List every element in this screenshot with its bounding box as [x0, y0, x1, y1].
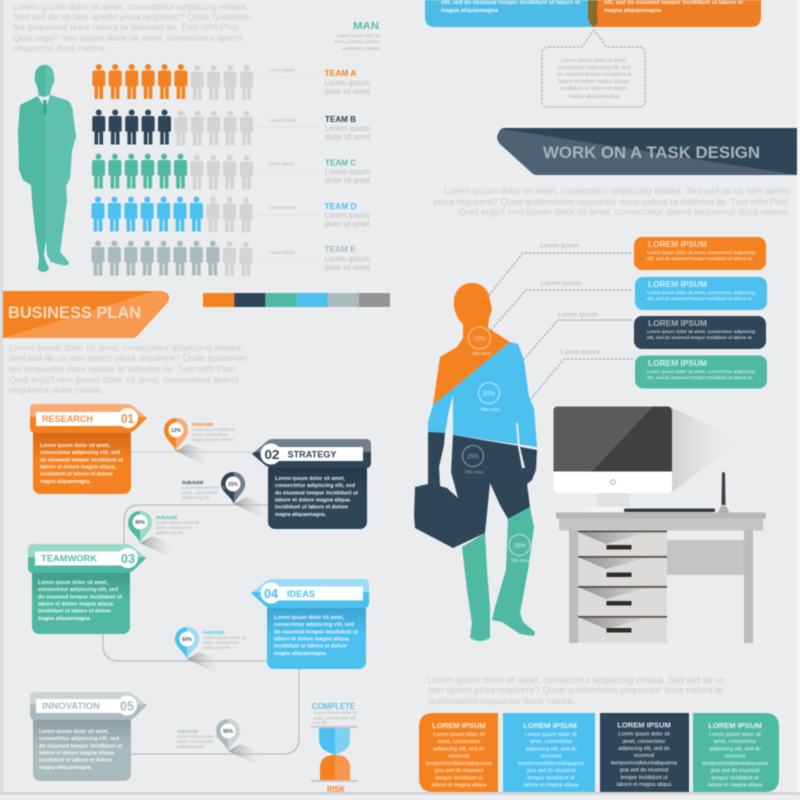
callout pill: blue: elit, sed do eiusmod tempor incididunt ut labore et. — [647, 296, 753, 301]
bottom paragraph — [428, 675, 725, 707]
card: strategy step 02: 02 — [264, 447, 280, 462]
card: innovation step 05: Lorem ipsum dolor sit amet, — [39, 729, 110, 735]
bottom card: navy: adipiscing elit, sed do — [618, 746, 670, 752]
bottom card: blue: labore et magna aliqua — [524, 782, 578, 788]
business plan paragraph — [9, 343, 248, 396]
callout pill: navy — [634, 316, 766, 349]
figure segment: orange head and shoulder — [433, 283, 510, 405]
team C label: dolor sit amet. — [325, 175, 372, 185]
figure: businessman segmented by colour — [414, 283, 537, 641]
figure value labels: 25% — [513, 544, 526, 550]
row: team A icons — [92, 64, 253, 100]
card: teamwork step 03: TEAMWORK — [41, 554, 98, 564]
card: strategy step 02: do eiusmod tempor incididunt ut — [275, 490, 358, 496]
card: innovation step 05: incididunt ut labore et dolore — [39, 758, 112, 764]
figure value labels: 20% — [483, 392, 496, 398]
work paragraph: Lorem ipsum dolor sit amet, consectetur adipiscing elitasa. Sed wid de us tam aperts — [444, 186, 790, 197]
card: strategy step 02: STRATEGY — [288, 450, 336, 460]
team E label: dolor sit amet. — [324, 262, 372, 272]
dashed callout bubble: Lorem ipsum dolor sit amet, — [561, 58, 627, 64]
team A label: dolor sit amet. — [324, 86, 372, 96]
bottom card: orange: Lorem ipsum dolor sit — [433, 732, 485, 738]
card: teamwork step 03: consectetur adipiscing elit, sed — [38, 587, 118, 593]
row: team C icons — [92, 154, 253, 190]
dashed callout bubble: do eiusmod tempor incididunt ut — [556, 72, 632, 78]
team A label: TEAM A — [324, 68, 356, 78]
team B label: Lorem ipsum — [270, 118, 296, 122]
bottom card: teal: eiusmod — [725, 754, 745, 760]
business plan paragraph: Sed wid de us tam aperts plura requirere? Quae quidemie- — [9, 353, 248, 364]
bottom card: blue: tempor incididunt ut — [527, 776, 575, 782]
bottom card: teal: temporincididuntaliquama — [702, 761, 768, 767]
hourglass: complete to risk: Lorem ipsum dolor sit — [314, 710, 358, 715]
pin: 60 percent: adipiscing elit — [203, 645, 231, 650]
bottom card: teal: LOREM IPSUM — [708, 721, 762, 730]
heading banner: business plan: BUSINESS PLAN — [8, 304, 141, 322]
hourglass: complete to risk — [311, 701, 358, 794]
bottom card: navy: LOREM IPSUM — [617, 720, 671, 730]
bottom card: orange — [419, 713, 498, 792]
team C label — [256, 158, 372, 185]
pin: 95 percent: 95% — [223, 729, 234, 735]
pin: 40 percent: SUBJUDE — [156, 515, 178, 520]
team E label: TEAM E — [324, 244, 356, 254]
pin: 25 percent: SUBJUDE — [182, 480, 204, 485]
row: team B icons — [92, 110, 253, 146]
card: strategy step 02: Lorem ipsum dolor sit amet, — [275, 476, 346, 482]
business plan paragraph: tes sequuntur duce natura ta videntes ile. Tum mihi Piso. — [9, 364, 237, 375]
pin: 12 percent: adipiscing elit sed do — [192, 437, 234, 442]
callout pill: navy: elit, sed do eiusmod tempor incididunt ut labore et. — [647, 335, 753, 340]
team D label: Lorem ipsum — [324, 210, 370, 220]
intro paragraph: man section: Lorem ipsum dolor sit amet, consectetur adipiscing elitasa. — [13, 2, 248, 13]
pin: 25 percent: Lorem ipsum dolor sit — [182, 485, 226, 490]
heading banner: business plan — [3, 291, 169, 338]
card: research step 01: Lorem ipsum dolor sit amet, — [40, 443, 111, 449]
card: teamwork step 03: 03 — [121, 551, 135, 566]
card: ideas step 04: incididunt ut labore et dolore — [274, 644, 347, 650]
card: innovation step 05: labore et dolore magna aliqua. — [39, 750, 116, 756]
pin: 95 percent: amet, consectetur — [177, 739, 213, 744]
dashed leader lines with labels: Lorem ipsum — [540, 244, 579, 250]
bottom card: blue: eiusmod — [541, 754, 561, 760]
pin: 12 percent: SUBJUDE — [192, 422, 214, 427]
intro paragraph: man section: sequuntur duce natura. — [13, 43, 107, 54]
bottom card: navy: Lorem ipsum dolor sit — [618, 732, 670, 738]
pin: 25 percent: amet, consectetur — [182, 490, 218, 495]
dashed callout bubble — [542, 30, 645, 107]
bottom card: teal: labore et magna aliqua — [708, 782, 762, 788]
bottom card: navy: amet, consectetur — [623, 739, 666, 745]
card: teamwork step 03: labore et dolore magna aliqua. — [38, 602, 115, 608]
bottom card: blue: LOREM IPSUM — [523, 721, 577, 730]
team D label — [256, 201, 372, 228]
callout pill: orange: LOREM IPSUM — [648, 239, 707, 249]
team A label — [256, 68, 372, 96]
card: research step 01: labore et dolore magna aliqua. — [40, 464, 117, 470]
bottom card: navy: temporincididuntaliquama — [611, 760, 677, 766]
card: research step 01: RESEARCH — [42, 414, 93, 424]
icon: man in suit silhouette — [18, 65, 76, 272]
pin: 25 percent: adipiscing elit — [182, 495, 210, 500]
work paragraph: plura requirere? Quae quidemietes sequuntur duce natura ta videntes ile. Tum mihi Piso. — [434, 197, 790, 208]
figure value labels — [464, 336, 530, 563]
team C label: TEAM C — [325, 158, 356, 168]
figure value labels: 25% — [467, 454, 480, 460]
card: ideas step 04: do eiusmod tempor incididunt ut — [274, 630, 358, 636]
bottom paragraph: Lorem ipsum dolor sit amet, consectetur adipiscing elitasa. Sed wid de us — [428, 675, 725, 686]
card: strategy step 02: magna aliquaemagna. — [275, 512, 326, 518]
hourglass: complete to risk: sed do — [313, 720, 327, 725]
pin: 12 percent: 12% — [171, 428, 182, 434]
card: teamwork step 03: do eiusmod tempor incididunt ut — [38, 594, 122, 600]
figure value labels: Title Here — [510, 558, 530, 563]
connector lines between steps — [103, 452, 299, 754]
card: teamwork step 03: incididunt ut labore et dolore — [38, 608, 111, 614]
dashed callout bubble: magna aliquaemagna. — [568, 94, 620, 100]
bottom card: teal: gna sed do eiusmod — [711, 768, 759, 774]
bottom card: navy: gna sed do eiusmod — [620, 768, 668, 774]
bottom card: orange: temporincididuntaliquama — [426, 761, 492, 767]
callout pill: blue: Lorem ipsum dolor sit amet, consectetur adipiscing — [647, 290, 755, 295]
team B label — [256, 114, 372, 142]
bottom card: orange: labore et magna aliqua — [432, 782, 486, 788]
pin: 12 percent: Lorem ipsum dolor sit — [192, 427, 236, 432]
figure value labels: Title Here — [464, 470, 484, 474]
bottom card: orange: LOREM IPSUM — [432, 721, 486, 730]
team B label: TEAM B — [325, 114, 356, 124]
heading: man: MAN — [353, 20, 379, 32]
figure segment: navy waist, arm and briefcase — [414, 432, 537, 548]
bottom card: orange: tempor incididunt ut — [435, 776, 483, 782]
heading banner: work on a task design — [497, 128, 797, 175]
work paragraph: Quid ergo? rem ipsum dolor sit amet, consectetur aperts sequuntur duce natura. — [459, 207, 790, 218]
hourglass: complete to risk: amet, consectetur elit — [313, 716, 357, 720]
bottom card: orange: gna sed do eiusmod — [435, 768, 483, 774]
pin: 25 percent: 25% — [228, 482, 239, 488]
team E label — [256, 244, 372, 272]
card: ideas step 04: labore et dolore magna aliqua. — [274, 636, 351, 642]
colour palette strip — [203, 293, 390, 307]
percentage badge: 25 percent waist — [462, 446, 484, 466]
card: teamwork step 03: magna aliquaemagna. — [38, 616, 92, 622]
callout pill: teal: Lorem ipsum dolor sit amet, consectetur adipiscing — [647, 369, 755, 374]
arm highlight sliver — [516, 422, 525, 468]
bottom card: blue: amet, consectetur — [530, 739, 573, 745]
card: innovation step 05: INNOVATION — [42, 701, 100, 711]
dashed callout bubble: incididunt ut labore et dolore — [561, 86, 627, 92]
team E label: Lorem ipsum — [324, 254, 370, 264]
pin: 40 percent: adipiscing elit — [156, 530, 184, 535]
hourglass: complete to risk: COMPLETE — [312, 701, 355, 711]
figure segment: teal legs — [462, 507, 535, 641]
pin: 40 percent: amet, consectetur — [156, 525, 192, 530]
row: team D icons — [92, 196, 252, 232]
callout pill: blue: LOREM IPSUM — [648, 279, 707, 289]
card: innovation step 05: magna aliquaemagna. — [39, 765, 93, 771]
card: ideas step 04 — [251, 579, 369, 669]
callout pill: blue — [635, 277, 767, 310]
desk with drawers — [556, 512, 766, 643]
heading: man — [334, 20, 381, 51]
pin: 60 percent — [175, 627, 247, 672]
card: ideas step 04: consectetur adipiscing elit, sed — [274, 622, 354, 628]
pin: 95 percent: Lorem ipsum dolor sit — [177, 734, 221, 739]
pin: 12 percent — [164, 418, 236, 464]
pin: 95 percent: adipiscing elit — [177, 744, 205, 749]
top cards: blue and orange overlap: magna aliquaemagna — [441, 8, 498, 14]
bottom paragraph: tam aperts plura requirere? Quae quidemietes sequuntur duce natura ta — [428, 685, 724, 696]
pin: 60 percent: SUBJUDE — [203, 630, 225, 635]
bottom card: navy: eiusmod — [634, 753, 654, 759]
top cards: blue and orange overlap: magna aliquaemagna — [604, 8, 661, 14]
dashed callout bubble: labore et dolore magna aliqua. — [558, 79, 630, 85]
bottom card: teal: adipiscing elit, sed do — [709, 746, 761, 752]
heading: man: amet, eiusmod semper — [334, 39, 380, 44]
bottom card: blue: Lorem ipsum dolor sit — [525, 732, 577, 738]
bottom card: navy: tempor incididunt ut — [620, 775, 668, 781]
bottom card: blue — [503, 713, 595, 792]
pin: 12 percent: amet, consectetur — [192, 432, 228, 437]
pin: 25 percent — [182, 472, 270, 517]
bottom card: blue: adipiscing elit, sed do — [525, 746, 577, 752]
percentage badge: 20 percent head — [468, 327, 490, 349]
pin: 60 percent: 60% — [182, 637, 193, 643]
card: strategy step 02 — [252, 439, 371, 529]
bottom card: teal: Lorem ipsum dolor sit — [709, 732, 761, 738]
row: team E icons — [92, 240, 252, 276]
pin: 60 percent: amet, consectetur — [203, 640, 239, 645]
heading: man: Lorem ipsum dolor sit — [337, 33, 381, 38]
pin: 40 percent: Lorem ipsum dolor sit — [156, 520, 200, 525]
team D label: TEAM D — [324, 201, 356, 211]
card: research step 01: do eiusmod tempor incididunt ut — [40, 458, 123, 464]
percentage badge: 25 percent leg — [509, 534, 530, 556]
card: ideas step 04: 04 — [264, 586, 279, 601]
pin: 95 percent: SUBJUDE — [177, 729, 199, 734]
card: strategy step 02: consectetur adipiscing elit, sed — [275, 483, 355, 489]
callout pill: orange — [634, 237, 766, 270]
heading: man: incididunt ut labore — [342, 46, 380, 51]
card: ideas step 04: magna aliquaemagna. — [274, 651, 328, 657]
card: research step 01: 01 — [121, 411, 134, 426]
intro paragraph: man section: tes sequuntur duce natura ta videntes ile. Tum mihi Piso. — [13, 22, 240, 33]
figure value labels: Title Here — [471, 351, 491, 356]
card: strategy step 02: incididunt ut labore et dolore — [275, 504, 348, 510]
card: innovation step 05: consectetur adipiscing elit, sed — [39, 736, 119, 742]
bottom paragraph: quidemietes sequuntur duce natura. — [428, 696, 575, 707]
bottom card: navy — [600, 713, 689, 792]
team B label: dolor sit amet. — [325, 132, 372, 142]
team B label: Lorem ipsum — [325, 123, 370, 133]
monitor and keyboard — [554, 406, 742, 512]
team D label: dolor sit amet. — [324, 218, 372, 228]
pin: 40 percent — [128, 511, 200, 556]
pin: 40 percent: 40% — [135, 520, 146, 526]
card: innovation step 05: do eiusmod tempor incididunt ut — [39, 744, 122, 750]
team E label: Lorem ipsum — [269, 250, 295, 255]
card: ideas step 04: IDEAS — [287, 589, 315, 599]
team A label: Lorem ipsum — [324, 78, 370, 88]
team A label: Lorem ipsum — [269, 68, 295, 72]
dashed callout bubble: consectetur adipiscing elit, sed — [558, 65, 630, 71]
card: innovation step 05: 05 — [120, 698, 134, 714]
top cards: blue and orange overlap: elit, sed do eiusmod tempor incididunt ut labore et — [441, 0, 580, 6]
card: innovation step 05 — [30, 692, 147, 781]
callout pill: navy: Lorem ipsum dolor sit amet, consectetur adipiscing — [647, 329, 755, 334]
bottom card: orange: amet, consectetur — [438, 739, 481, 745]
card: teamwork step 03: Lorem ipsum dolor sit amet, — [38, 580, 109, 586]
intro paragraph: man section — [13, 2, 253, 54]
bottom card: orange: eiusmod — [449, 754, 469, 760]
card: teamwork step 03 — [28, 544, 146, 634]
card: research step 01: incididunt ut labore et dolore — [40, 472, 113, 478]
team C label: Lorem ipsum — [268, 161, 294, 166]
bottom card: teal — [693, 713, 779, 792]
card: strategy step 02: labore et dolore magna aliqua. — [275, 498, 352, 504]
dashed leader lines with labels: Lorem ipsum — [541, 281, 581, 287]
bottom card: blue: temporincididuntaliquama — [518, 761, 584, 767]
intro paragraph: man section: Sed wid de us tam aperts plura requirere? Quae quidemie- — [13, 12, 253, 23]
top cards: blue and orange overlap — [425, 0, 761, 27]
team C label: Lorem ipsum — [325, 166, 370, 176]
card: ideas step 04: Lorem ipsum dolor sit amet, — [274, 615, 345, 621]
intro paragraph: man section: Quid ergo? rem ipsum dolor sit amet, consectetur aperts — [13, 33, 243, 44]
dashed leader lines with labels — [489, 244, 633, 400]
callout pill: orange: Lorem ipsum dolor sit amet, consectetur adipiscing — [647, 250, 755, 255]
callout pill: orange: elit, sed do eiusmod tempor incididunt ut labore et. — [647, 256, 753, 261]
business plan paragraph: sequuntur duce natura. — [9, 385, 103, 396]
card: research step 01: consectetur adipiscing elit, sed — [40, 450, 120, 456]
bottom card: blue: gna sed do eiusmod — [527, 768, 575, 774]
bottom card: orange: adipiscing elit, sed do — [433, 746, 485, 752]
figure value labels: Title Here — [480, 407, 500, 412]
bottom card: teal: amet, consectetur — [714, 739, 757, 745]
top cards: blue and orange overlap: elit, sed do eiusmod tempor incididunt ut labore et — [604, 0, 743, 6]
hourglass: complete to risk: RISK — [327, 785, 345, 794]
business plan paragraph: Quid ergo? rem ipsum dolor sit amet, consectetur aperts — [9, 375, 239, 386]
callout pill: navy: LOREM IPSUM — [648, 318, 707, 328]
business plan paragraph: Lorem ipsum dolor sit amet, consectetur adipiscing elitasa. — [9, 343, 243, 354]
callout pill: teal — [635, 356, 767, 388]
card: research step 01 — [30, 404, 147, 494]
pin: 95 percent — [177, 719, 264, 764]
pin: 60 percent: Lorem ipsum dolor sit — [203, 635, 247, 640]
heading banner: work on a task design: WORK ON A TASK DESIGN — [543, 143, 760, 162]
figure value labels: 20% — [473, 336, 486, 342]
callout pill: teal: LOREM IPSUM — [648, 358, 707, 368]
dashed leader lines with labels: Lorem ipsum — [560, 350, 600, 356]
callout pill: teal: elit, sed do eiusmod tempor incididunt ut labore et. — [647, 375, 753, 380]
dashed leader lines with labels: Lorem ipsum — [558, 312, 598, 318]
figure segment: blue torso and arm — [428, 342, 537, 447]
card: research step 01: magna aliquaemagna. — [40, 479, 91, 485]
bottom card: teal: tempor incididunt ut — [711, 776, 759, 782]
work paragraph — [434, 186, 790, 218]
percentage badge: 20 percent torso — [478, 382, 500, 404]
bottom card: navy: labore et magna aliqua — [617, 782, 671, 788]
team D label: Lorem ipsum — [269, 205, 295, 210]
